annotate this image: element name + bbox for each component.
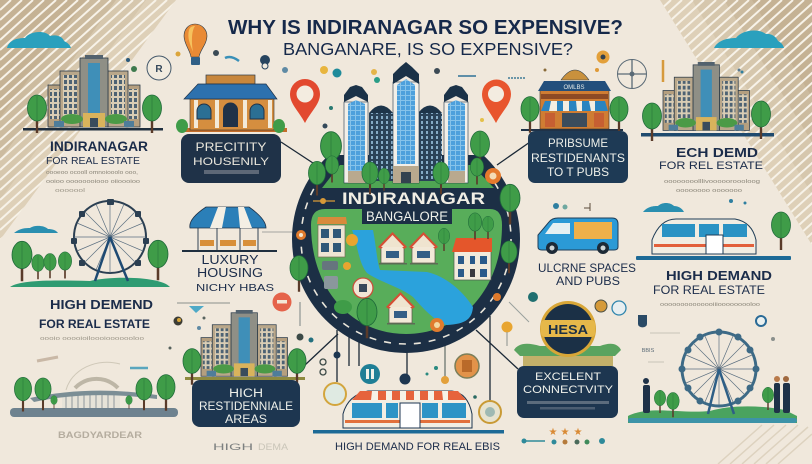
icons: row of small markers (522, 438, 605, 444)
panel: ferris wheel left (10, 199, 170, 342)
icons: stars (549, 427, 583, 438)
icons: stars: ★ (549, 427, 558, 438)
water (352, 230, 473, 325)
icon: circular badge (147, 56, 171, 80)
panel: left building block (23, 55, 163, 194)
upper green strip (322, 165, 494, 188)
diagonal stripe pattern: top right (660, 0, 812, 244)
icons: stars: ★ (574, 427, 583, 438)
panel: high residential areas (183, 310, 306, 453)
panel: left building block: FOR REAL ESTATE (46, 155, 140, 167)
icon: cloud top left (7, 32, 71, 48)
panel: precitity housing: PRECITITY (196, 142, 267, 154)
panel: prime restaurants: TO T PUBS (547, 167, 609, 179)
panel: bottom tram (313, 391, 504, 453)
icons: bottom centre badges (324, 352, 501, 423)
small floating icons: top left (126, 50, 380, 128)
badge: HESA: HESA (548, 322, 589, 337)
panel: high demand with tram: HIGH DEMAND (666, 268, 772, 283)
panel: excellent connectivity: CONNECTVITY (523, 384, 614, 396)
panel: luxury housing (182, 207, 277, 294)
panel: prime restaurants: PRIBSUME (548, 138, 608, 150)
diagonal stripe pattern: top left (0, 0, 176, 240)
map heading: BANGALORE (366, 209, 448, 224)
small icons: above van (553, 199, 746, 211)
icon: cloud top right (714, 31, 784, 48)
panel: prime restaurants (521, 70, 628, 183)
panel: high residential areas: DEMA (258, 442, 289, 453)
panel: urban spaces and pubs (538, 218, 636, 288)
panel: precitity housing: HOUSENILY (193, 156, 270, 168)
title: BANGANARE, IS SO EXPENSIVE? (283, 39, 573, 59)
icons: markers above right wheel: BBIS (642, 348, 655, 354)
panel: ferris wheel left: FOR REAL ESTATE (39, 317, 150, 331)
title (228, 17, 623, 59)
panel: left building block: ooooool (55, 188, 85, 194)
icon: small cloud right (643, 203, 684, 212)
central circular map (290, 155, 520, 353)
icons: stars: ★ (561, 427, 570, 438)
panel: high demand with tram (636, 212, 791, 308)
panel: prime restaurants: RESTIDENANTS (531, 153, 625, 165)
panel: ferris wheel left: HIGH DEMEND (50, 297, 153, 312)
panel: right building block: oooooooolllivoooooroooloog (664, 179, 760, 185)
panel: ferris wheel left: oooio ooooioiloooiooooooloo (40, 336, 144, 342)
panel: stadium (10, 357, 178, 440)
panel: right building block: FOR REL ESTATE (659, 160, 763, 172)
skyline towers (344, 62, 468, 183)
panel: precitity housing (176, 75, 287, 183)
faint stripes bottom right (718, 425, 812, 464)
road ring (292, 155, 520, 353)
panel: bottom tram: HIGH DEMAND FOR REAL EBIS (335, 441, 500, 453)
icons: small markers right of map (502, 292, 626, 346)
panel: excellent connectivity: EXCELENT (535, 371, 601, 383)
map heading: INDIRANAGAR (342, 189, 485, 208)
panel: left building block: ooioo oooooooiooo oiioooioo (46, 179, 140, 185)
panel: high residential areas: RESTIDENNIALE (199, 401, 293, 413)
icon: small cloud left (14, 226, 58, 233)
title: WHY IS INDIRANAGAR SO EXPENSIVE? (228, 17, 623, 39)
icon: key (662, 60, 664, 82)
panel: high residential areas: HIGH (213, 442, 253, 453)
small icons: centre left (168, 292, 326, 375)
panel: high residential areas: AREAS (225, 414, 267, 426)
panel: right building block: oooooooo ooooooo (676, 188, 742, 194)
map houses (317, 217, 492, 324)
panel: urban spaces and pubs: ULCRNE SPACES (538, 263, 636, 275)
panel: right building block: ECH DEMD (676, 146, 758, 160)
icon: location pin right (482, 80, 511, 123)
connector lines (262, 142, 530, 402)
panel: luxury housing: NICHY HBAS (196, 282, 274, 294)
icon: circular badge: R (155, 64, 163, 75)
small floating icons: top right (434, 68, 744, 122)
road dashes (300, 183, 512, 345)
panel: high residential areas: HICH (229, 388, 263, 400)
icon: location pin left (290, 79, 320, 123)
panel: left building block: oooeoo ocooll omnoiooolo ooo, (46, 170, 139, 176)
icon: gear badge (595, 50, 610, 72)
icon: light bulb (184, 24, 207, 65)
map trees and markers (290, 213, 517, 338)
panel: left building block: INDIRANAGAR (50, 139, 148, 154)
icons: markers above right wheel (638, 315, 775, 362)
panel: ferris wheel right (628, 328, 797, 423)
green map area (311, 209, 502, 334)
panel: stadium: BAGDYARDEAR (58, 430, 143, 440)
panel: luxury housing: LUXURY (202, 252, 259, 267)
trees around skyline (308, 131, 520, 224)
panel: luxury housing: HOUSING (197, 265, 263, 280)
panel: urban spaces and pubs: AND PUBS (556, 276, 620, 288)
map heading (342, 189, 485, 224)
icon: compass (618, 60, 646, 88)
panel: high demand with tram: FOR REAL ESTATE (653, 283, 765, 297)
panel: prime restaurants: OMLBS (563, 85, 585, 91)
panel: right building block (641, 62, 774, 194)
panel: high demand with tram: oooooooooooooiiiooooooooloo (660, 302, 760, 308)
panel: excellent connectivity (514, 301, 621, 418)
